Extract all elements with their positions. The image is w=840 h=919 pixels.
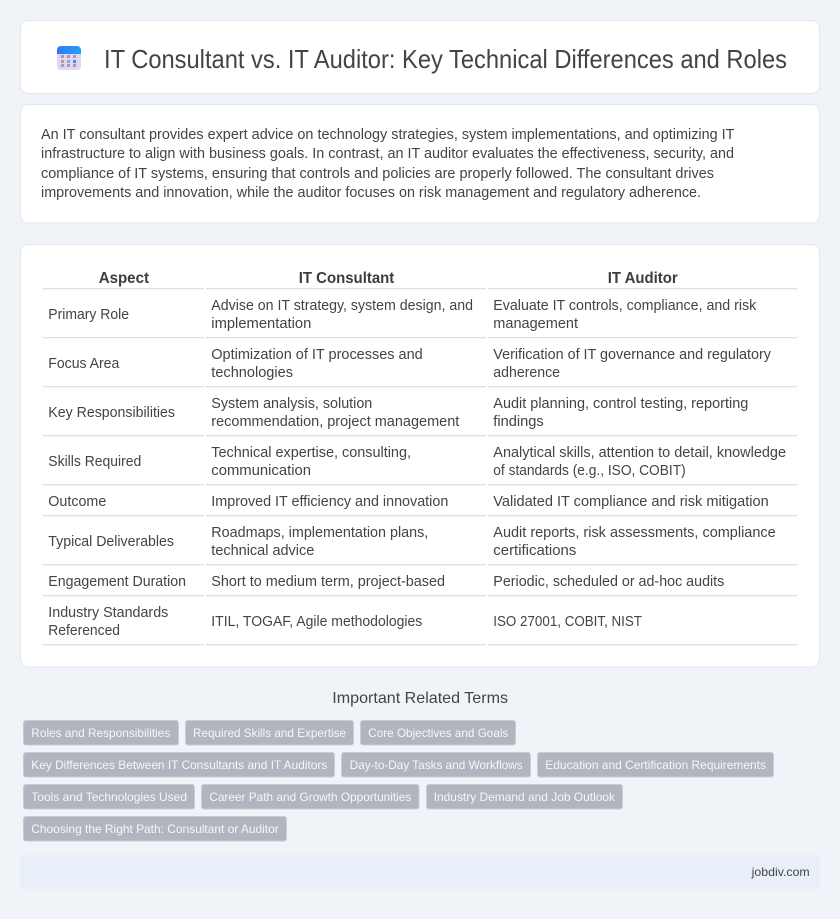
row: Skills Required: Analytical skills, attention to detail, knowledge xyxy=(493,445,786,461)
row: Typical Deliverables xyxy=(43,525,797,565)
tag: Core Objectives and Goals: Core Objectives and Goals xyxy=(368,726,508,740)
table header row xyxy=(43,270,797,289)
tag: Day-to-Day Tasks and Workflows xyxy=(342,752,530,777)
row: Typical Deliverables: Roadmaps, implementation plans, xyxy=(211,525,428,541)
row: Focus Area: Focus Area xyxy=(48,356,119,372)
row: Key Responsibilities: Key Responsibilities xyxy=(48,405,175,421)
tag: Required Skills and Expertise xyxy=(186,720,354,745)
row: Typical Deliverables: certifications xyxy=(493,543,576,559)
row: Primary Role: Evaluate IT controls, compliance, and risk xyxy=(493,298,757,314)
tag: Tools and Technologies Used xyxy=(24,784,194,809)
intro paragraph: improvements and innovation, while the auditor focuses on risk management and regulatory adherence. xyxy=(41,185,701,201)
row: Industry Standards Referenced: Referenced xyxy=(48,623,120,639)
icon: calendar xyxy=(57,46,81,70)
tag: Choosing the Right Path: Choosing the Right Path: Consultant or Auditor xyxy=(31,822,279,836)
row: Primary Role xyxy=(43,298,797,338)
intro paragraph: An IT consultant provides expert advice on technology strategies, system implementations, and optimizing IT xyxy=(41,127,735,143)
row: Key Responsibilities: recommendation, project management xyxy=(211,414,459,430)
table header row: IT Auditor xyxy=(608,270,678,287)
row: Key Responsibilities xyxy=(43,396,797,436)
intro paragraph xyxy=(41,127,735,201)
row: Key Responsibilities: System analysis, solution xyxy=(211,396,372,412)
row: Typical Deliverables: Audit reports, risk assessments, compliance xyxy=(493,525,776,541)
row: Engagement Duration: Periodic, scheduled or ad-hoc audits xyxy=(493,574,724,590)
heading: Important Related Terms: Important Related Terms xyxy=(332,690,508,707)
row: Outcome: Validated IT compliance and risk mitigation xyxy=(493,494,769,510)
tag: Education and Certification Requirements xyxy=(538,752,774,777)
row: Engagement Duration: Short to medium term, project-based xyxy=(211,574,445,590)
tag: Industry Demand and Job Outlook: Industry Demand and Job Outlook xyxy=(434,790,616,804)
footer xyxy=(20,855,820,889)
row: Outcome xyxy=(43,494,797,516)
tag: Key Differences: Key Differences Between IT Consultants and IT Auditors xyxy=(31,758,327,772)
tag: Core Objectives and Goals xyxy=(360,720,516,745)
tag list xyxy=(24,720,774,841)
tag: Career Path and Growth Opportunities xyxy=(202,784,419,809)
title: IT Consultant vs. IT Auditor: Key Technical Differences and Roles xyxy=(104,46,787,74)
row: Industry Standards Referenced: Industry Standards xyxy=(48,605,168,621)
tag: Day-to-Day Tasks and Workflows: Day-to-Day Tasks and Workflows xyxy=(350,758,523,772)
tag: Education and Certification Requirements: Education and Certification Requirements xyxy=(545,758,766,772)
row: Skills Required: communication xyxy=(211,463,311,479)
tag: Roles and Responsibilities xyxy=(24,720,178,745)
panel: intro text xyxy=(20,104,820,223)
row: Focus Area: technologies xyxy=(211,365,293,381)
panel: comparison table xyxy=(20,244,820,667)
table header row: Aspect xyxy=(99,270,150,287)
row: Skills Required: Technical expertise, consulting, xyxy=(211,445,411,461)
footer: jobdiv.com xyxy=(751,865,810,879)
row: Primary Role: management xyxy=(493,316,578,332)
row: Industry Standards Referenced: ISO 27001, COBIT, NIST xyxy=(493,614,642,630)
row: Industry Standards Referenced xyxy=(43,605,797,645)
row: Typical Deliverables: technical advice xyxy=(211,543,314,559)
row: Focus Area: adherence xyxy=(493,365,560,381)
row: Outcome: Improved IT efficiency and innovation xyxy=(211,494,448,510)
row: Engagement Duration xyxy=(43,574,797,596)
intro paragraph: compliance of IT systems, ensuring that controls and policies are properly followed. The consultant drives xyxy=(41,166,714,182)
row: Outcome: Outcome xyxy=(48,494,106,510)
tag: Career Path and Growth Opportunities: Career Path and Growth Opportunities xyxy=(209,790,411,804)
panel: header xyxy=(20,20,820,94)
row: Typical Deliverables: Typical Deliverables xyxy=(48,534,174,550)
tag: Choosing the Right Path xyxy=(24,816,286,841)
tag: Roles and Responsibilities: Roles and Responsibilities xyxy=(31,726,170,740)
row: Focus Area xyxy=(43,347,797,387)
tag: Industry Demand and Job Outlook xyxy=(426,784,622,809)
tag: Tools and Technologies Used: Tools and Technologies Used xyxy=(31,790,187,804)
table header row: IT Consultant xyxy=(299,270,395,287)
intro paragraph: infrastructure to align with business goals. In contrast, an IT auditor evaluates the effectiveness, security, and xyxy=(41,146,734,162)
tag: Required Skills and Expertise: Required Skills and Expertise xyxy=(193,726,346,740)
row: Skills Required: Skills Required xyxy=(48,454,141,470)
tag: Key Differences xyxy=(24,752,334,777)
row: Engagement Duration: Engagement Duration xyxy=(48,574,186,590)
row: Primary Role: implementation xyxy=(211,316,311,332)
row: Industry Standards Referenced: ITIL, TOGAF, Agile methodologies xyxy=(211,614,422,630)
row: Focus Area: Optimization of IT processes and xyxy=(211,347,423,363)
row: Focus Area: Verification of IT governance and regulatory xyxy=(493,347,772,363)
row: Skills Required: of standards (e.g., ISO, COBIT) xyxy=(493,463,686,479)
row: Skills Required xyxy=(43,445,797,485)
row: Primary Role: Primary Role xyxy=(48,307,129,323)
row: Key Responsibilities: findings xyxy=(493,414,544,430)
row: Primary Role: Advise on IT strategy, system design, and xyxy=(211,298,473,314)
row: Key Responsibilities: Audit planning, control testing, reporting xyxy=(493,396,748,412)
